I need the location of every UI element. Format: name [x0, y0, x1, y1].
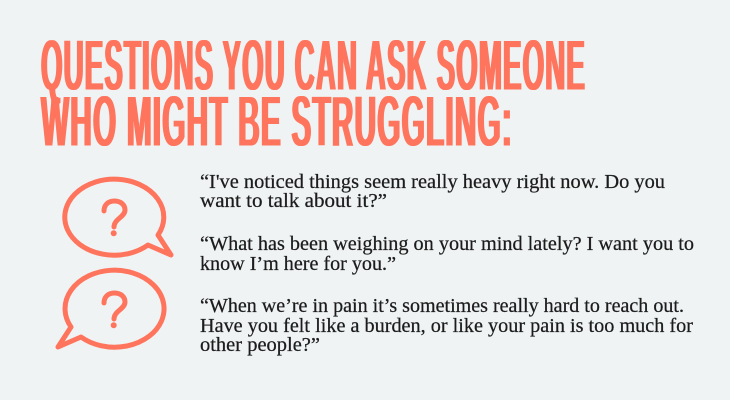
text block: question 2: [200, 233, 694, 275]
text block: question 1: [200, 171, 665, 212]
text block: question 3: “When we’re in pain it’s sometimes really hard to reach out.: [200, 295, 684, 317]
text block: question 1: “I've noticed things seem really heavy right now. Do you: [200, 171, 665, 193]
text block: question 3: Have you felt like a burden, or like your pain is too much for: [200, 315, 693, 337]
icon: speech bubble with question mark, top: [65, 179, 171, 255]
text block: question 1: want to talk about it?”: [200, 190, 387, 212]
text block: question 2: “What has been weighing on your mind lately? I want you to: [200, 233, 694, 255]
text block: question 3: [200, 295, 693, 356]
text block: question 2: know I’m here for you.”: [200, 253, 396, 275]
icon: speech bubble with question mark, bottom: [58, 270, 164, 347]
title: [41, 26, 586, 162]
text block: question 3: other people?”: [200, 334, 320, 356]
